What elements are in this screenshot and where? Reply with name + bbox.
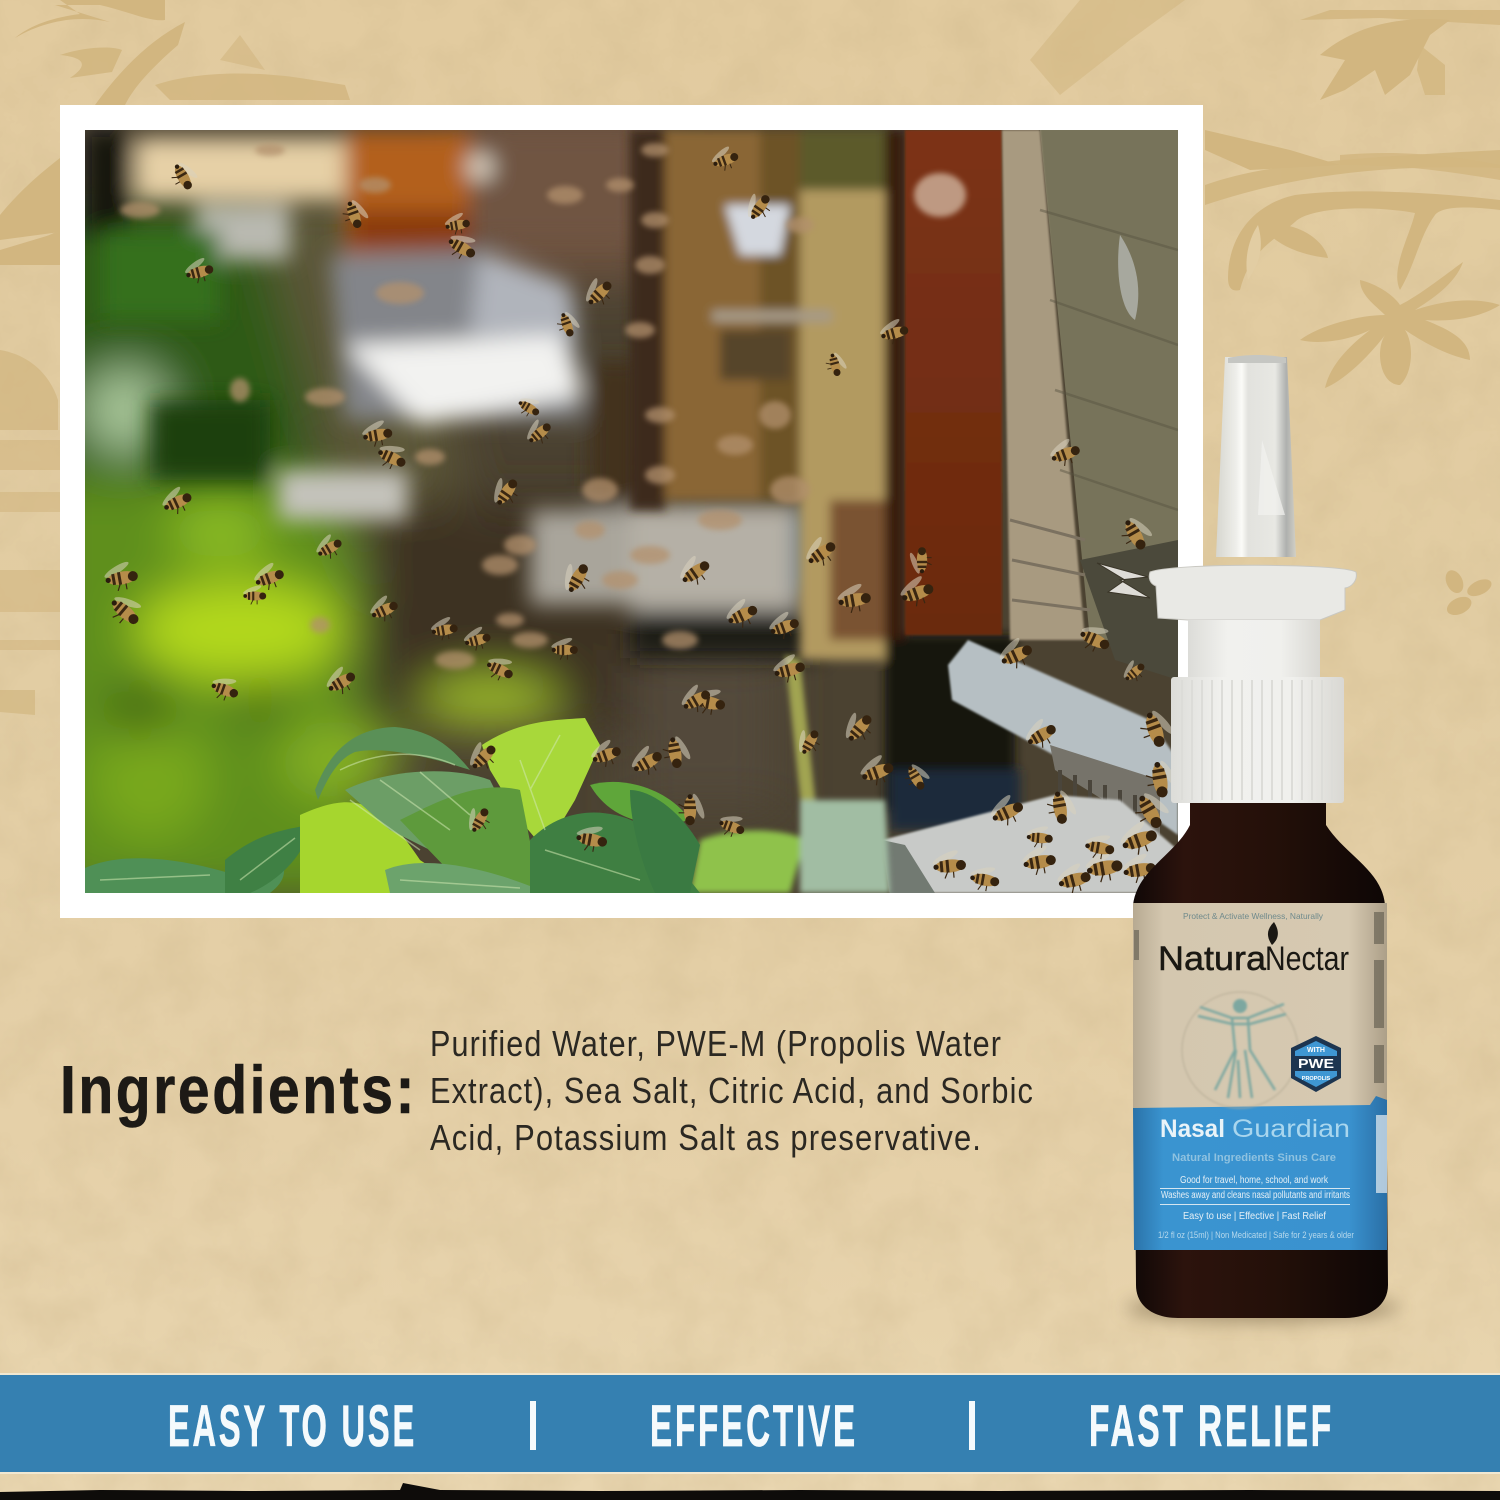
hive ramp and landing board (882, 640, 1178, 893)
brand logo: Natura (1158, 940, 1266, 978)
green stem and blurred plants (690, 655, 890, 893)
banner label: easy to use: EASY TO USE (168, 1394, 417, 1459)
bottle ground shadow (1124, 1295, 1400, 1321)
label side panel (1134, 912, 1387, 1193)
actuator flange (1149, 565, 1356, 620)
photo frame: beehive with swarm of bees (40, 105, 1203, 918)
collar (1188, 620, 1320, 678)
blue label band (1133, 1096, 1387, 1250)
red hive plank (905, 130, 1002, 635)
brand logo (1158, 922, 1349, 978)
bottom banner (0, 1373, 1500, 1474)
blurred distant bees (120, 143, 966, 669)
label benefit lines (1158, 1175, 1354, 1241)
hive wood panel (1002, 130, 1178, 680)
ingredients text block (430, 1023, 1034, 1158)
photo background blurred scene (40, 110, 1182, 900)
label benefit lines: 1/2 fl oz (15ml) | Non Medicated | Safe for 2 years & older (1158, 1230, 1354, 1241)
ingredients text block: Extract), Sea Salt, Citric Acid, and Sorbic (430, 1070, 1034, 1111)
foreground mint leaves (85, 718, 700, 893)
banner divider (530, 1401, 536, 1450)
product name: Guardian (1232, 1115, 1350, 1143)
botanical background illustrations (0, 0, 1500, 715)
label benefit lines: Easy to use | Effective | Fast Relief (1183, 1211, 1326, 1222)
product bottle: Nasal Guardian nasal spray (1124, 355, 1400, 1321)
banner divider right (969, 1401, 975, 1450)
PWE propolis badge (1291, 1036, 1341, 1092)
PWE propolis badge: PWE (1298, 1056, 1334, 1071)
banner label: effective: EFFECTIVE (650, 1394, 858, 1459)
ingredients text block: Purified Water, PWE-M (Propolis Water (430, 1023, 1002, 1064)
product name: Nasal (1160, 1115, 1225, 1143)
torn black bottom edge (0, 1483, 1500, 1500)
heading: Ingredients: Ingredients: (60, 1052, 417, 1128)
ingredients text block: Acid, Potassium Salt as preservative. (430, 1117, 982, 1158)
ribbed screw cap (1171, 677, 1344, 803)
label tagline: Protect & Activate Wellness, Naturally (1183, 911, 1324, 921)
clear nozzle tip (1216, 355, 1296, 557)
vitruvian figure line drawing (1182, 992, 1298, 1108)
label benefit lines: Washes away and cleans nasal pollutants and irritants (1161, 1190, 1350, 1201)
PWE propolis badge: WITH (1307, 1047, 1325, 1054)
label benefit lines: Good for travel, home, school, and work (1180, 1175, 1329, 1186)
sharp foreground bees (101, 142, 1182, 896)
kraft label top (1133, 903, 1387, 1110)
brand logo: Nectar (1265, 940, 1349, 978)
label subtitle: Natural Ingredients Sinus Care (1172, 1152, 1336, 1164)
amber glass bottle (1133, 795, 1388, 1318)
PWE propolis badge: PROPOLIS (1302, 1076, 1331, 1082)
product name (1160, 1115, 1350, 1143)
